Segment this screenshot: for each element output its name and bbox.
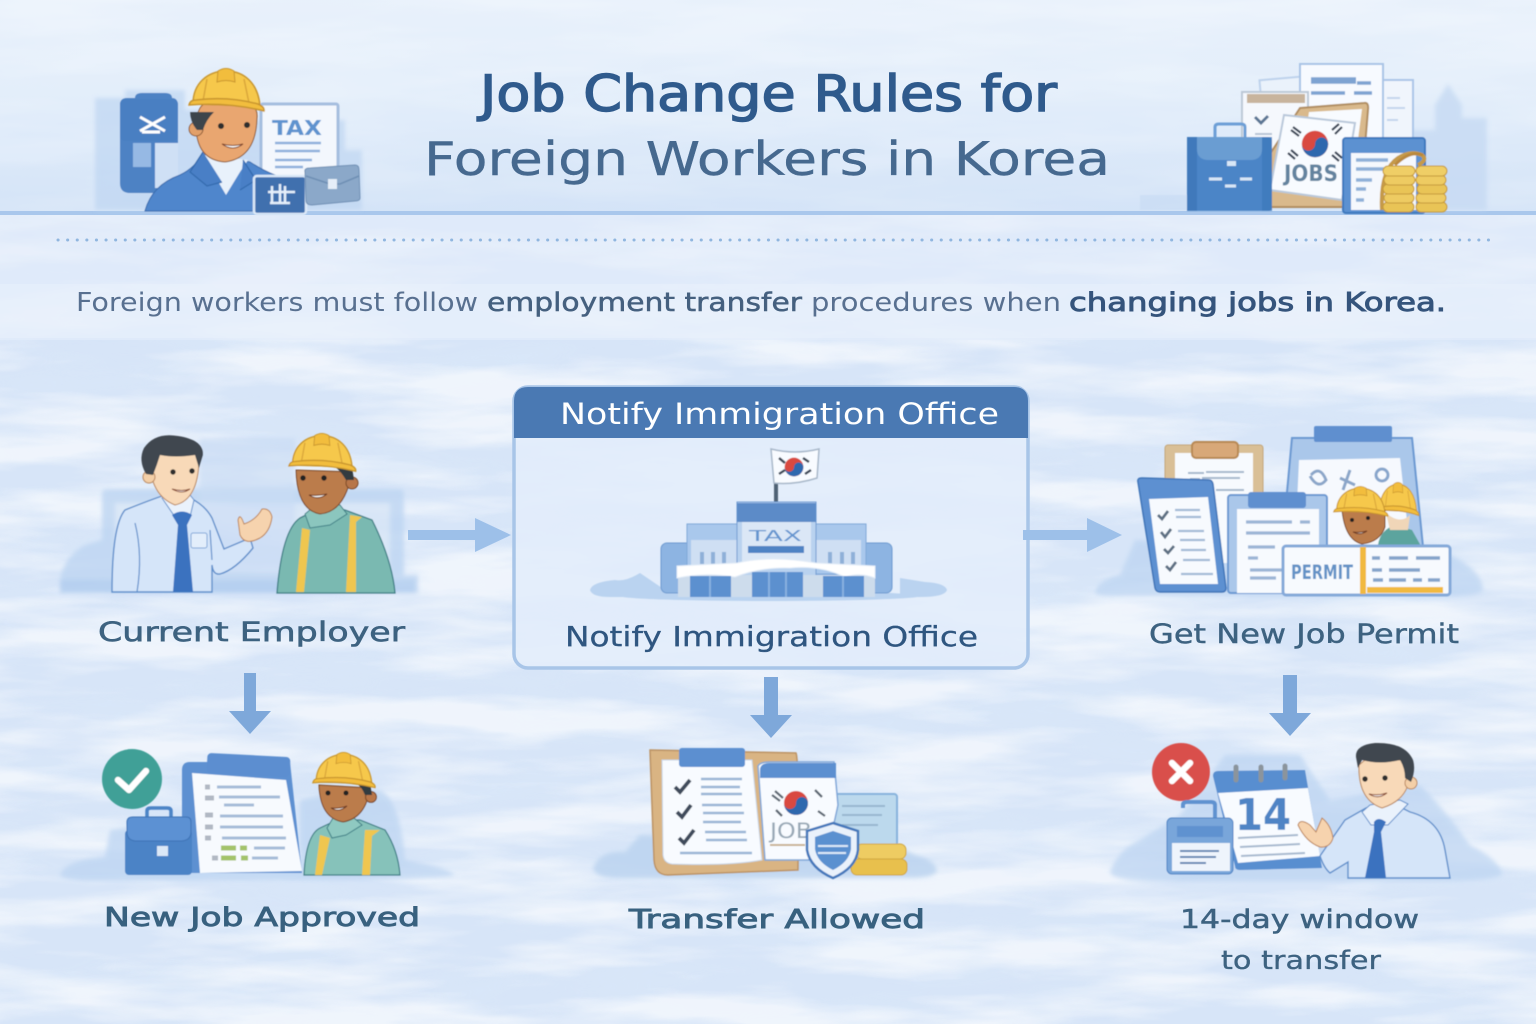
permit card: PERMIT: [1291, 561, 1354, 584]
panel header: [514, 387, 1028, 438]
panel label: Notify Immigration Office: [565, 620, 978, 653]
brown clipboard: [1265, 103, 1368, 207]
icon: shield: [807, 823, 858, 878]
coins: [851, 844, 907, 875]
label: new job approved: New Job Approved: [104, 903, 420, 933]
subtitle: Foreign workers must follow: [76, 288, 478, 318]
clipboard: [182, 753, 302, 873]
coins: [1382, 153, 1447, 212]
title: Job Change Rules for: [477, 65, 1057, 123]
header illustration: worker with documents: [95, 68, 362, 214]
permit card: [1283, 546, 1450, 595]
jobs document: JOB: [768, 819, 812, 843]
manager: [1298, 743, 1450, 878]
tablet: [1343, 138, 1425, 213]
icon: red x: [1152, 743, 1210, 801]
label: current employer: Current Employer: [98, 617, 406, 648]
jobs flag paper: [1270, 115, 1355, 200]
label: get new job permit: Get New Job Permit: [1149, 619, 1459, 650]
jobs document: [758, 762, 838, 860]
step: transfer allowed illustration: [593, 748, 937, 878]
frame: [834, 794, 897, 846]
step: 14-day window illustration: [1110, 743, 1502, 881]
subtitle: procedures when: [811, 288, 1061, 318]
tax document: [261, 104, 338, 179]
arrow: immigration office down: [750, 677, 792, 738]
step: new job approved illustration: [60, 749, 455, 880]
step: current employer illustration: [60, 433, 418, 593]
brown clipboard: [1165, 442, 1263, 563]
worker group: [1334, 482, 1421, 546]
folder: [120, 93, 178, 193]
brown clipboard board: [650, 750, 798, 875]
panel header: Notify Immigration Office: [560, 397, 999, 431]
icon: government building: TAX: [747, 527, 802, 545]
briefcase: [305, 165, 360, 205]
checklist: [662, 748, 762, 864]
arrow: permit down: [1269, 675, 1311, 736]
tablet: [254, 176, 306, 214]
tax document: TAX: [272, 116, 323, 140]
icon: government building: [590, 449, 947, 601]
subtitle: changing jobs in Korea.: [1069, 288, 1446, 318]
briefcase: [1187, 124, 1272, 211]
manager: [112, 435, 272, 592]
flag: [771, 449, 819, 483]
icon: green check: [102, 749, 162, 809]
dotted divider: [58, 238, 1490, 242]
jobs flag paper: JOBS: [1282, 162, 1338, 187]
title: [424, 65, 1110, 186]
report clipboard: [1228, 492, 1327, 593]
header illustration: jobs paperwork: [1140, 64, 1487, 213]
title: Foreign Workers in Korea: [424, 132, 1110, 186]
label: transfer allowed: Transfer Allowed: [628, 905, 925, 935]
arrow: employer down: [229, 673, 271, 734]
calendar: 14: [1235, 790, 1291, 841]
calendar: [1213, 766, 1322, 870]
step: new job permit illustration: [1095, 426, 1483, 596]
label: 14-day window to transfer: [1180, 905, 1419, 976]
panel: notify immigration office: [514, 387, 1028, 668]
worker: [277, 433, 395, 593]
subtitle: employment transfer: [487, 288, 802, 318]
label: 14-day window to transfer: 14-day window: [1180, 905, 1419, 935]
checklist tablet: [1138, 478, 1226, 592]
subtitle: [76, 288, 1446, 318]
worker: [304, 752, 400, 875]
worker: [145, 68, 277, 211]
briefcase: [125, 808, 192, 875]
bag: [1167, 802, 1233, 874]
label: 14-day window to transfer: to transfer: [1221, 946, 1381, 976]
arrow: immigration office to new job permit: [1023, 518, 1122, 552]
blue clipboard: [1282, 426, 1423, 548]
arrow: employer to immigration office: [408, 518, 511, 552]
header rule: [0, 211, 1536, 215]
